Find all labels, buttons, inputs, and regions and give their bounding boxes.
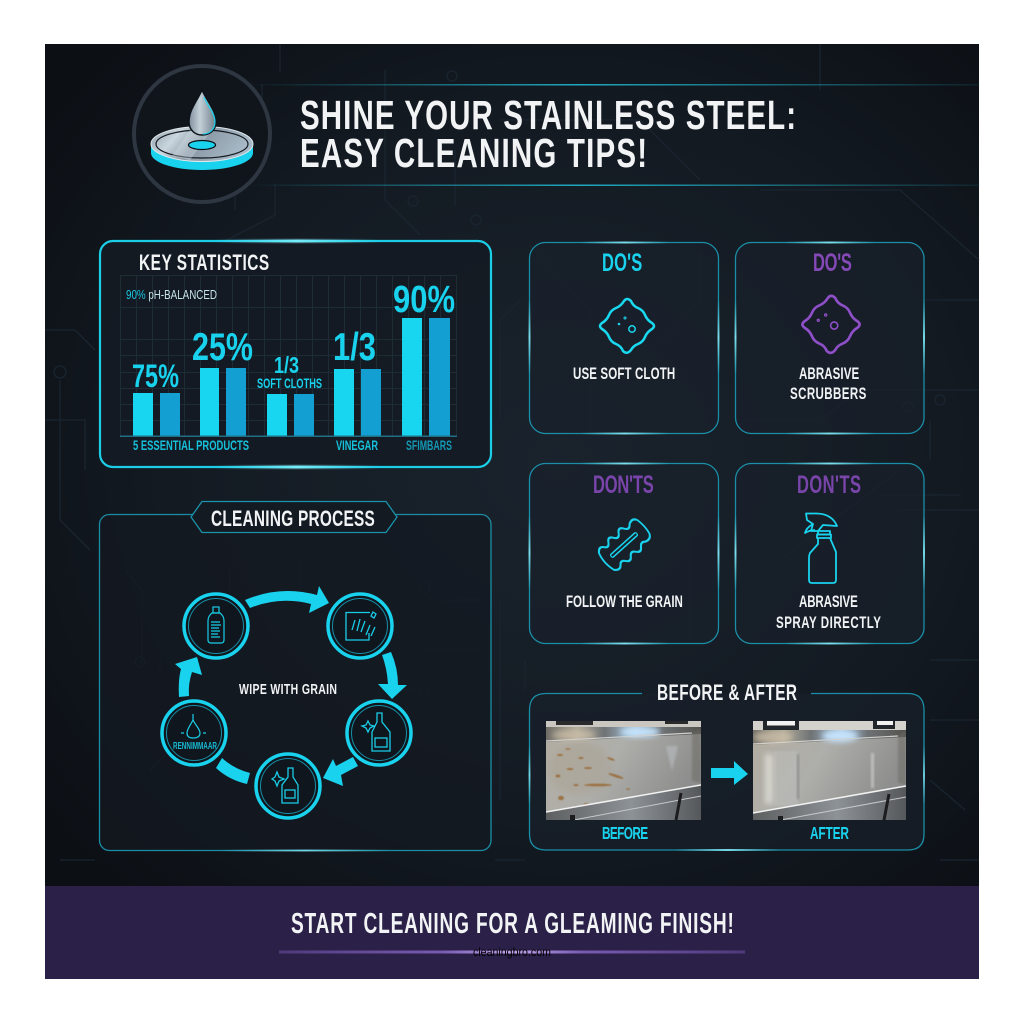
heading: DO'S [602, 250, 642, 277]
card: don'ts follow the grain [528, 462, 720, 644]
panel: cleaning process [100, 502, 491, 852]
cycle arrows [175, 586, 407, 786]
panel: before and after [528, 681, 925, 851]
title [300, 92, 796, 176]
step 3: bottle with sparkle icon [347, 701, 411, 765]
bar chart [120, 318, 457, 437]
axis labels [133, 437, 452, 453]
heading: DON'TS [593, 472, 654, 499]
label: SPRAY DIRECTLY [776, 614, 881, 633]
icon: spray bottle [805, 514, 837, 583]
icon: sponge [595, 515, 655, 574]
stat values [132, 279, 455, 394]
label: ABRASIVE [799, 593, 858, 612]
icon: soft cloth [600, 299, 654, 353]
heading: DO'S [813, 250, 852, 277]
step 5: drop icon with rinse label [162, 701, 226, 765]
heading: key statistics: KEY STATISTICS [139, 251, 269, 276]
axis labels: 5 ESSENTIAL PRODUCTS [133, 437, 249, 453]
caption: after: AFTER [810, 824, 849, 844]
footer url: cleaningbro.com [473, 945, 551, 959]
stat values: 75% [132, 358, 179, 394]
label [776, 593, 881, 633]
stat values: 1/3 [274, 352, 299, 378]
axis labels: SFIMBARS [406, 437, 452, 453]
label: FOLLOW THE GRAIN [566, 593, 683, 612]
stat label: pH-balanced: 90% pH-BALANCED [126, 287, 217, 302]
stat values: 90% [393, 279, 455, 321]
footer call to action: START CLEANING FOR A GLEAMING FINISH! [291, 908, 734, 940]
label: SCRUBBERS [790, 385, 866, 404]
axis labels: VINEGAR [336, 437, 378, 453]
circuit board pattern [45, 44, 979, 860]
heading: BEFORE & AFTER [657, 681, 797, 706]
dark main panel [45, 44, 979, 886]
header rules [250, 84, 980, 186]
footer band [45, 886, 979, 979]
card: do's use soft cloth [528, 242, 720, 434]
arrow: before to after [711, 761, 748, 785]
step 2: wiping icon [328, 594, 392, 658]
footer rule [279, 950, 745, 954]
center label: WIPE WITH GRAIN [239, 680, 337, 697]
title: EASY CLEANING TIPS! [300, 130, 647, 176]
icon: scrubber [802, 296, 860, 353]
photo: before [546, 721, 701, 820]
step 4: bottle with label icon [256, 754, 320, 818]
label: ABRASIVE [799, 365, 859, 384]
stat values: 1/3 [333, 326, 376, 369]
card: don'ts spray directly [734, 462, 925, 644]
heading: DON'TS [797, 472, 861, 499]
caption: before: BEFORE [602, 824, 648, 844]
stat values: 25% [192, 326, 253, 369]
label [790, 365, 866, 404]
step 1: bottle icon [184, 594, 248, 658]
heading tag: cleaning process [191, 502, 397, 532]
label: USE SOFT CLOTH [573, 365, 675, 384]
title: SHINE YOUR STAINLESS STEEL: [300, 92, 796, 138]
step 5: drop icon with rinse label: RENNIMMAAR [173, 741, 217, 752]
card: do's abrasive scrubbers [734, 242, 925, 434]
heading tag: cleaning process: CLEANING PROCESS [211, 507, 375, 532]
stat values: SOFT CLOTHS [257, 375, 322, 391]
photo: after [753, 721, 906, 820]
chart grid [120, 275, 457, 436]
header icon: droplet on steel disc [134, 66, 270, 202]
panel: key statistics [100, 240, 491, 468]
